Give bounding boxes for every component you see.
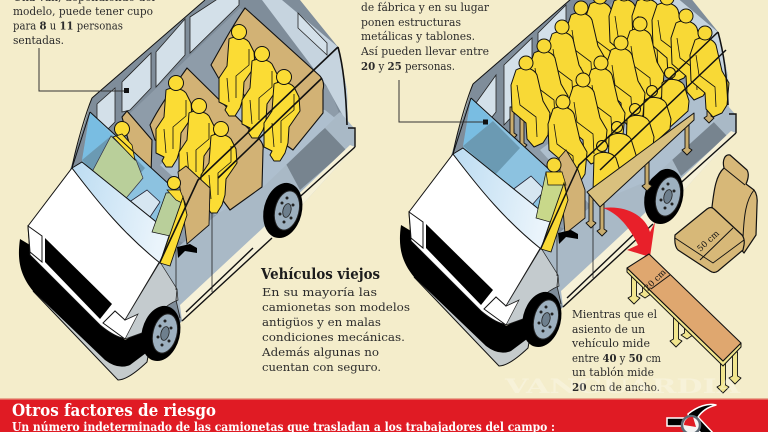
rear seat bench [211, 8, 324, 150]
text: right van description: 20 y 25 personas. [361, 59, 455, 73]
text: plank comparison [571, 307, 661, 394]
near side roof rail [160, 47, 347, 262]
near row passengers seen from behind [593, 68, 689, 202]
leader line right [399, 80, 488, 124]
text: plank comparison: 20 cm de ancho. [572, 380, 660, 394]
text: right van description [360, 0, 489, 73]
plank bench with 20 cm measure: 20 cm [643, 268, 668, 293]
van right: benches overloaded [400, 0, 736, 366]
top row passengers [511, 0, 729, 147]
text: vehiculos viejos [260, 265, 410, 374]
text: left van description: modelo, puede tener cupo [13, 4, 153, 18]
floor light strip [160, 95, 335, 215]
passengers: middle row [156, 76, 237, 213]
text: left van description: para 8 u 11 personas [13, 18, 123, 32]
text: vehiculos viejos: antigüos y en malas [262, 315, 381, 329]
middle seat bench [150, 68, 263, 210]
text: vehiculos viejos: camionetas son modelos [262, 300, 410, 314]
near side roof rail [541, 32, 728, 248]
text: left van description [13, 0, 155, 47]
driver with seat [536, 150, 585, 252]
far windows [476, 5, 566, 125]
text: vehiculos viejos: Además algunas no [261, 345, 379, 359]
icon: magnifier with hammer [667, 404, 716, 432]
near bench plank [587, 113, 694, 207]
co-driver seen through glass [92, 136, 143, 203]
loose seat with 50 cm measure [675, 155, 757, 272]
watermark: VANGUARDIA [503, 374, 741, 398]
leader line left [39, 48, 129, 93]
dashboard instruments [125, 190, 160, 217]
near bench legs [586, 122, 692, 236]
plank bench with 20 cm measure [627, 254, 741, 393]
middle row passengers [548, 17, 664, 186]
dashboard [453, 148, 551, 249]
text: right van description: Así pueden llevar entre [360, 44, 489, 58]
text: vehiculos viejos: Vehículos viejos [260, 265, 380, 283]
text: right van description: metálicas y tablones. [361, 29, 475, 43]
text: plank comparison: Mientras que el [572, 307, 657, 321]
footer heading: Otros factores de riesgo [12, 401, 216, 421]
text: vehiculos viejos: En su mayoría las [262, 285, 377, 299]
text: right van description: ponen estructuras [361, 15, 461, 29]
text: vehiculos viejos: condiciones mecánicas. [262, 330, 405, 344]
text: right van description: de fábrica y en su lugar [361, 0, 489, 14]
far bench legs [507, 78, 725, 150]
side mirror [558, 230, 578, 244]
text: plank comparison: un tablón mide [572, 365, 654, 379]
van left: standard seating [19, 0, 355, 380]
driver with seat [152, 166, 210, 266]
far windows [97, 0, 327, 140]
text: vehiculos viejos: cuentan con seguro. [262, 360, 381, 374]
windshield with tint [72, 112, 183, 235]
front seat [122, 111, 152, 175]
dashboard [72, 162, 170, 263]
passengers: rear row [219, 24, 300, 161]
floor light strip [540, 90, 725, 205]
red arrow [603, 207, 655, 257]
text: plank comparison: vehículo mide [571, 336, 650, 350]
text: plank comparison: asiento de un [572, 322, 645, 336]
red footer band [0, 398, 768, 432]
text: plank comparison: entre 40 y 50 cm [572, 351, 661, 365]
text: left van description: sentadas. [13, 33, 64, 47]
side mirror [177, 244, 197, 258]
loose seat with 50 cm measure: 50 cm [696, 229, 722, 254]
windshield [453, 98, 564, 221]
